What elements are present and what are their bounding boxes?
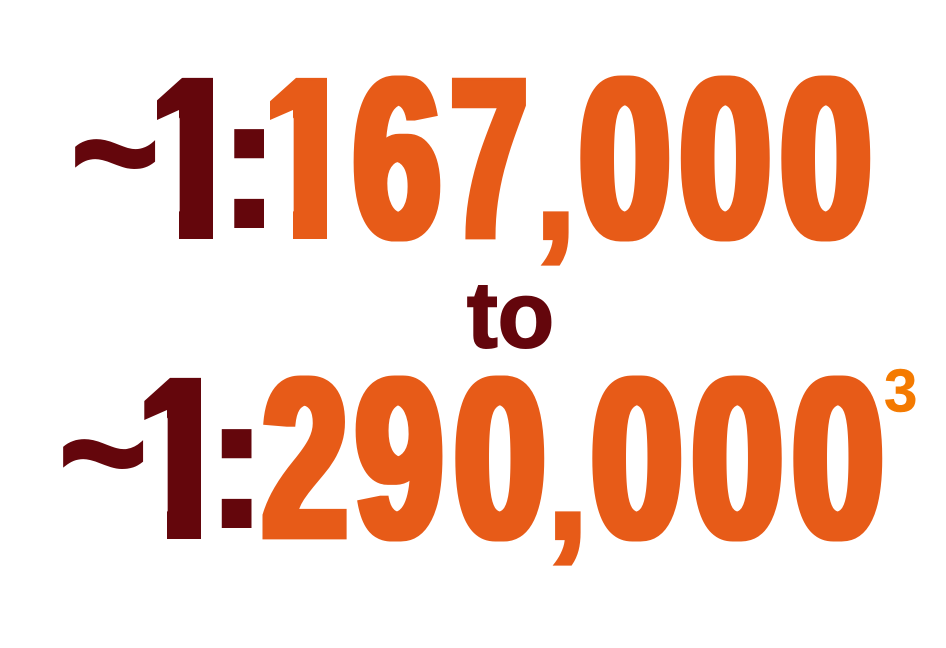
value 167,000: 0: [680, 32, 771, 286]
prefix ~1:: 1: [135, 332, 226, 586]
superscript reference 3: 3: [884, 358, 917, 424]
value 290,000: 0: [454, 332, 545, 586]
prefix ~1:: ~: [58, 354, 148, 549]
value 167,000: 0: [580, 32, 670, 286]
value 167,000: 0: [780, 32, 871, 286]
prefix ~1:: 1: [147, 32, 238, 286]
value 290,000: [263, 332, 883, 586]
prefix ~1:: :: [205, 356, 268, 568]
value 290,000: 0: [692, 332, 783, 586]
value 290,000: ,: [546, 389, 589, 573]
value 167,000: 7: [452, 31, 526, 286]
prefix ~1:: ~: [70, 54, 160, 249]
value 290,000: 0: [592, 332, 682, 586]
value 167,000: ,: [534, 89, 577, 273]
prefix ~1:: [75, 78, 264, 239]
value 167,000: 6: [354, 32, 440, 286]
prefix ~1:: :: [218, 56, 281, 268]
second ratio: ~1:290,000: [63, 376, 882, 566]
value 290,000: 0: [792, 332, 883, 586]
prefix ~1:: [63, 378, 252, 539]
value 290,000: 2: [263, 332, 347, 586]
value 167,000: 1: [261, 32, 352, 286]
first ratio: ~1:167,000: [75, 76, 870, 266]
connector word: to: to: [467, 262, 554, 367]
value 290,000: 9: [356, 332, 443, 586]
value 167,000: [270, 76, 870, 266]
